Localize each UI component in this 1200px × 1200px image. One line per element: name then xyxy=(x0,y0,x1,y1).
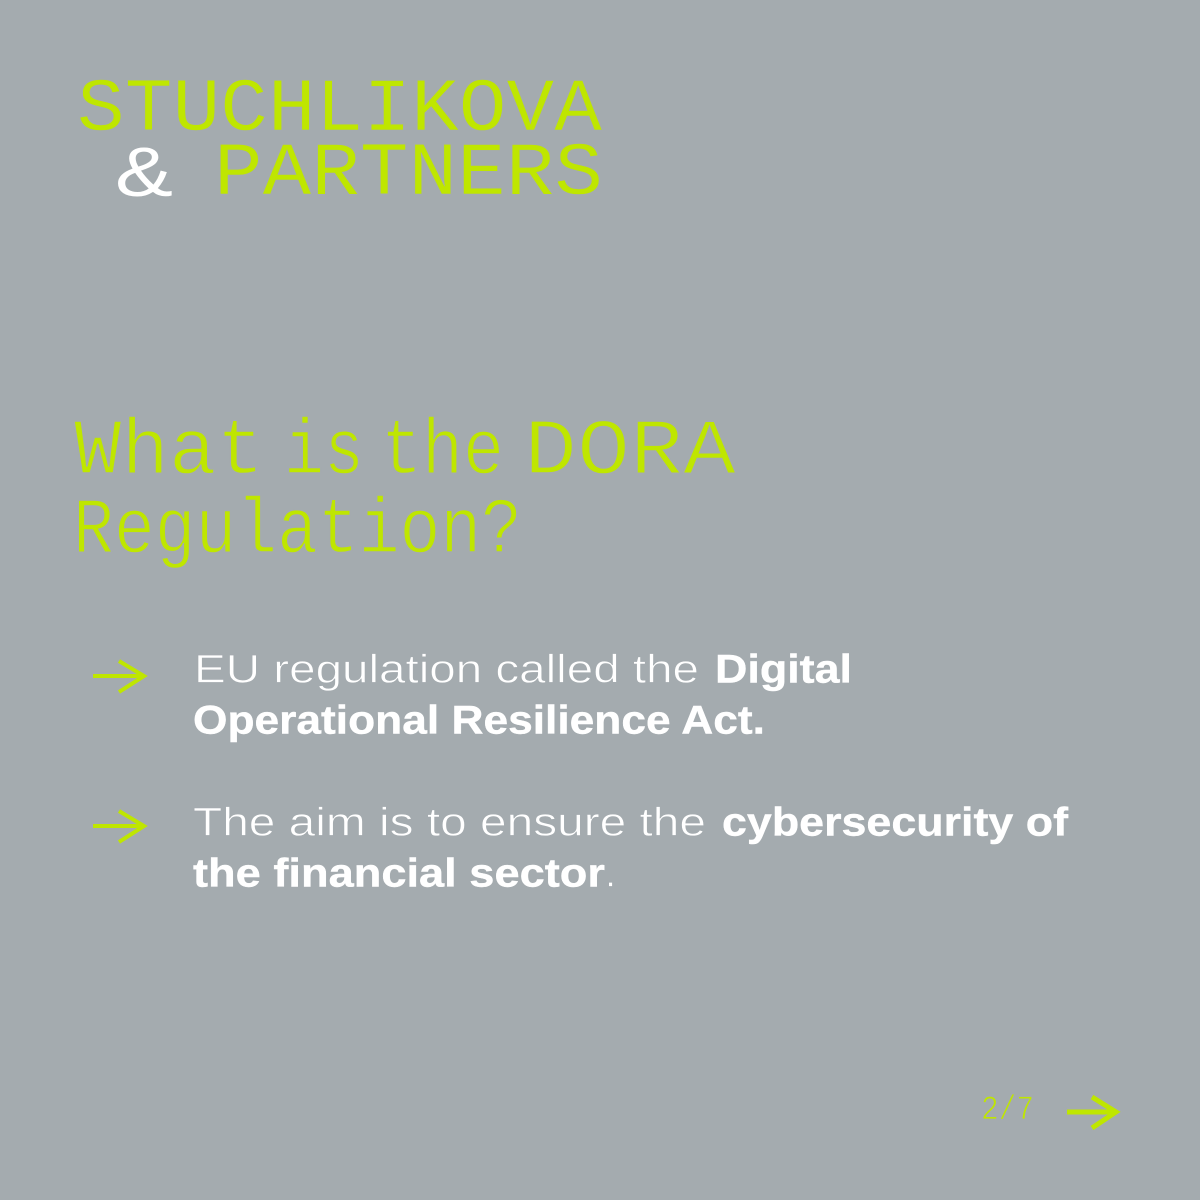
icon: arrow xyxy=(93,661,144,692)
icon: next arrow xyxy=(1067,1097,1116,1128)
bullet 1 text: Operational Resilience Act. xyxy=(193,698,765,742)
bullet 2 text: . xyxy=(605,852,616,896)
bullet 2 text xyxy=(193,800,1069,896)
heading line 1: the xyxy=(381,407,504,497)
heading line 1: What xyxy=(74,407,264,497)
bullet 1 xyxy=(93,648,852,742)
icon: arrow xyxy=(93,811,144,842)
heading line 1: DORA xyxy=(524,407,737,497)
heading line 1 xyxy=(74,407,737,497)
bullet 1 text xyxy=(193,648,852,742)
bullet 2 text: cybersecurity of xyxy=(722,800,1069,844)
heading line 2: Regulation? xyxy=(73,486,522,576)
bullet 2 xyxy=(93,800,1069,896)
logo xyxy=(77,68,603,217)
bullet 1 text: Digital xyxy=(715,648,852,692)
heading line 1: is xyxy=(284,407,364,497)
bullet 2 text: The aim is to ensure the xyxy=(193,800,706,844)
bullet 1 text: EU regulation called the xyxy=(194,648,699,692)
heading xyxy=(73,407,737,576)
logo line: Partners: PARTNERS xyxy=(214,132,603,217)
bullet 2 text: the financial sector xyxy=(193,852,605,896)
logo line: Stuchlikova: STUCHLIKOVA xyxy=(77,68,602,153)
logo ampersand: & xyxy=(115,133,173,211)
page number: 2/7 xyxy=(981,1092,1034,1130)
